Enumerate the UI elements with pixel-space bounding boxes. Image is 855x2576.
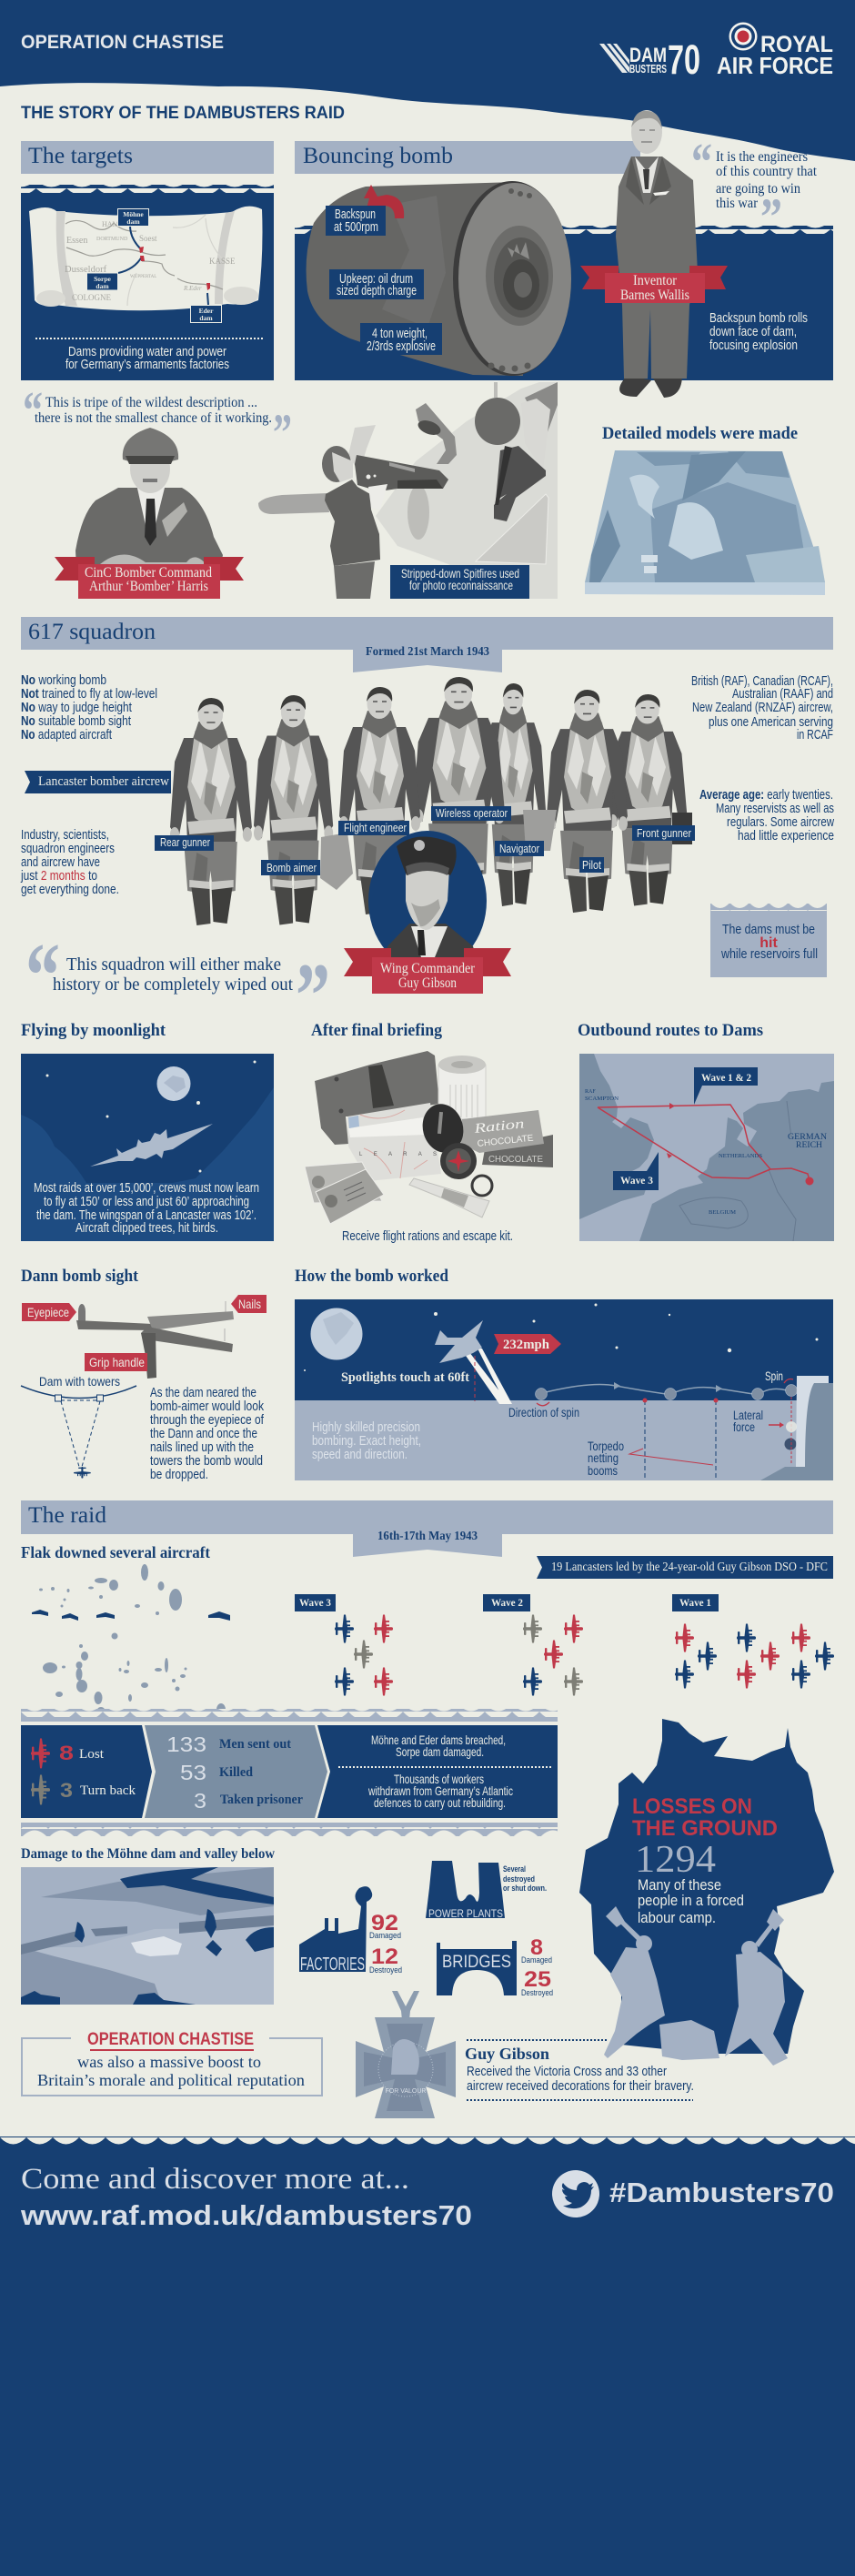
text: power plants: destroyed bbox=[503, 1874, 535, 1884]
text: 2 months: just 2 months to bbox=[20, 869, 97, 884]
camera bbox=[355, 455, 448, 491]
text: 2 months bbox=[20, 828, 119, 897]
quote: squadron: ” bbox=[296, 945, 330, 1047]
Lancaster silhouette bbox=[90, 1124, 213, 1167]
panel: results bbox=[317, 1725, 558, 1818]
label: bomb aimer: Bomb aimer bbox=[267, 861, 317, 874]
illustration: Dann bomb sight tool bbox=[76, 1301, 234, 1379]
map scroll: Essen bbox=[66, 236, 87, 246]
heading: Dann bomb sight: Dann bomb sight bbox=[21, 1267, 139, 1286]
logo: Dam Busters 70: 70 bbox=[668, 36, 700, 83]
label: pilot: Pilot bbox=[582, 858, 601, 872]
stats: factories: Destroyed bbox=[369, 1965, 402, 1975]
quote: Harris bbox=[23, 380, 292, 462]
figure: front gunner bbox=[609, 694, 687, 906]
stats: factories: Damaged bbox=[369, 1931, 401, 1940]
logo: Royal Air Force roundel: ROYAL bbox=[760, 32, 833, 57]
text: 2 months: and aircrew have bbox=[21, 855, 100, 870]
panel: results: withdrawn from Germany’s Atlantic bbox=[367, 1783, 513, 1798]
map scroll: WUPPERTAL bbox=[130, 275, 156, 279]
label: backspun: at 500rpm bbox=[334, 220, 378, 235]
header band bbox=[0, 0, 855, 161]
stats: bridges: 25 bbox=[524, 1967, 551, 1992]
text: 2 months: Industry, scientists, bbox=[21, 828, 109, 843]
icon: power plants: POWER PLANTS bbox=[428, 1907, 503, 1920]
caption: targets: for Germany’s armaments factories bbox=[65, 358, 229, 372]
callout: wave 1 and 2: Wave 1 & 2 bbox=[701, 1073, 751, 1084]
box: morale boost: was also a massive boost to bbox=[77, 2053, 261, 2071]
label: grip handle bbox=[85, 1353, 147, 1371]
quote: Harris: This is tripe of the wildest description ... bbox=[45, 395, 257, 410]
ribbon: Harris bbox=[55, 557, 244, 599]
torpedo netting booms: Torpedo bbox=[588, 1440, 624, 1453]
panel: results: Sorpe dam damaged. bbox=[396, 1744, 484, 1759]
panel: dams must be hit: hit bbox=[759, 935, 778, 951]
quote: squadron: history or be completely wiped out bbox=[53, 975, 293, 995]
quote: engineers: are going to win bbox=[716, 181, 800, 197]
label: Eder dam bbox=[191, 306, 222, 322]
text: backspun bomb rolls: down face of dam, bbox=[709, 325, 797, 339]
text: average age: Average age: early twenties. bbox=[699, 788, 833, 803]
text: losses on the ground: 1294 bbox=[635, 1839, 716, 1881]
caption: rations: Receive flight rations and escape kit. bbox=[342, 1229, 513, 1244]
map: outbound routes bbox=[579, 1054, 834, 1241]
icon: Victoria Cross: FOR VALOUR bbox=[386, 2088, 426, 2095]
pilot bbox=[475, 398, 520, 445]
text: power plants: Several bbox=[503, 1864, 526, 1874]
panel: results: Thousands of workers bbox=[394, 1772, 484, 1786]
stats: bridges bbox=[521, 1935, 553, 1997]
label: backspun bbox=[326, 206, 386, 236]
logo: Dam Busters 70 bbox=[599, 36, 700, 83]
text: Dann sight explanation: through the eyepiece of bbox=[150, 1413, 265, 1428]
illustration: Spitfire photo reconnaissance bbox=[258, 382, 558, 599]
list: no working bomb bbox=[21, 673, 157, 742]
compass bbox=[417, 1099, 492, 1196]
icon: turned back plane bbox=[31, 1775, 50, 1804]
torch bbox=[409, 1178, 489, 1217]
panel: losses: Turn back bbox=[80, 1783, 136, 1798]
panel: losses: 3 bbox=[60, 1779, 73, 1802]
panel: how the bomb worked: Spin bbox=[765, 1369, 783, 1383]
panel: how the bomb worked bbox=[295, 1299, 833, 1480]
caption: targets bbox=[65, 345, 229, 372]
map: outbound routes: SCAMPTON bbox=[585, 1096, 619, 1102]
label: wireless operator: Wireless operator bbox=[436, 806, 508, 820]
label: weight: 2/3rds explosive bbox=[367, 339, 436, 354]
map: outbound routes: RAF bbox=[585, 1089, 596, 1095]
heading: detailed models: Detailed models were made bbox=[602, 424, 798, 443]
aircraft: wave 1 bbox=[675, 1623, 834, 1689]
chocolate bars: Ration bbox=[472, 1116, 525, 1136]
figure: wireless operator bbox=[413, 677, 505, 909]
quote: engineers bbox=[691, 132, 818, 247]
quote: squadron bbox=[25, 924, 330, 1047]
ribbon: Harris: CinC Bomber Command bbox=[85, 565, 212, 581]
icon: factories bbox=[299, 1886, 372, 1975]
ribbon: Wing Commander Guy Gibson bbox=[344, 948, 511, 994]
logo: Dam Busters 70: DAM bbox=[629, 44, 667, 66]
ribbon: Lancaster bomber aircrew: Lancaster bomber aircrew bbox=[38, 774, 170, 789]
aircraft: wave 3 bbox=[335, 1614, 393, 1696]
panel: how the bomb worked: Direction of spin bbox=[508, 1406, 579, 1419]
illustration: terrain model bbox=[585, 450, 825, 595]
silhouettes: labourers bbox=[604, 1906, 788, 2066]
list: no working bomb: No way to judge height bbox=[21, 701, 132, 715]
list: no working bomb: No working bomb bbox=[21, 673, 106, 688]
label: wave 1 bbox=[672, 1594, 719, 1611]
panel: dams must be hit: while reservoirs full bbox=[720, 947, 818, 962]
label: Sorpe dam bbox=[87, 273, 118, 290]
icon: bridges: BRIDGES bbox=[442, 1953, 511, 1972]
tag: 232mph: 232mph bbox=[503, 1338, 550, 1352]
figure: navigator bbox=[481, 683, 546, 906]
stats: bridges: Destroyed bbox=[521, 1988, 553, 1997]
figure: flight engineer bbox=[339, 687, 420, 914]
label: upkeep: Upkeep: oil drum bbox=[339, 272, 413, 287]
stats: bridges: Damaged bbox=[521, 1955, 552, 1965]
panel: men bbox=[145, 1725, 327, 1818]
text: average age bbox=[699, 788, 834, 844]
panel: moonlight: the dam. The wingspan of a Lancaster was 102’. bbox=[36, 1208, 256, 1223]
label: eyepiece bbox=[22, 1303, 76, 1321]
text: average age: had little experience bbox=[738, 829, 834, 844]
box: morale boost: OPERATION CHASTISE bbox=[87, 2030, 254, 2049]
torpedo netting booms bbox=[588, 1398, 719, 1480]
heading: after final briefing: After final briefing bbox=[311, 1021, 442, 1040]
text: Guy Gibson bbox=[465, 2040, 694, 2100]
ribbon: 19 Lancasters bbox=[537, 1556, 833, 1579]
text: 2 months: squadron engineers bbox=[21, 842, 115, 856]
map scroll: COLOGNE bbox=[72, 293, 111, 302]
panel: how the bomb worked: bombing. Exact height, bbox=[312, 1434, 421, 1449]
map scroll: R.Eder bbox=[183, 285, 202, 292]
quote: squadron: This squadron will either make bbox=[66, 955, 281, 975]
footer band bbox=[0, 2137, 855, 2576]
text: losses on the ground: Many of these bbox=[638, 1877, 721, 1894]
footer text: web address: www.raf.mod.uk/dambusters70 bbox=[20, 2199, 472, 2231]
portrait: Guy Gibson bbox=[368, 831, 487, 971]
ribbon: Lancaster bomber aircrew bbox=[25, 771, 171, 793]
chocolate bars: CHOCOLATE bbox=[488, 1155, 543, 1165]
wallet bbox=[315, 1051, 439, 1145]
panel: how the bomb worked: speed and direction. bbox=[312, 1448, 407, 1462]
panel: how the bomb worked: Spotlights touch at 60ft bbox=[341, 1370, 469, 1385]
icon: factories: FACTORIES bbox=[300, 1955, 365, 1975]
stats: factories bbox=[369, 1911, 402, 1975]
label: flight engineer: Flight engineer bbox=[344, 821, 407, 834]
illustration: Lancaster aircrew bbox=[170, 677, 692, 925]
icon: bridges bbox=[437, 1941, 517, 1995]
chocolate bars: CHOCOLATE bbox=[477, 1134, 534, 1149]
map: outbound routes: NETHERLANDS bbox=[719, 1153, 762, 1159]
ribbon: Harris: Arthur ‘Bomber’ Harris bbox=[89, 579, 208, 594]
label: stripped-down Spitfires: for photo reconnaissance bbox=[409, 578, 513, 592]
callout: wave 3 bbox=[613, 1152, 659, 1190]
ribbon: raid date bbox=[353, 1530, 502, 1557]
panel: moonlight: to fly at 150’ or less and just 60’ approaching bbox=[44, 1195, 249, 1209]
figure: Arthur Harris bbox=[75, 428, 223, 569]
diagram: dam with towers: Dam with towers bbox=[39, 1374, 120, 1389]
panel: how the bomb worked: Highly skilled precision bbox=[312, 1420, 420, 1435]
text: power plants bbox=[503, 1864, 547, 1893]
panel: men: 53 bbox=[180, 1761, 206, 1784]
panel: men: Killed bbox=[219, 1765, 254, 1780]
text: Dann sight explanation: the Dann and once the bbox=[150, 1427, 257, 1441]
heading: how the bomb worked: How the bomb worked bbox=[295, 1267, 448, 1286]
text: Dann sight explanation: be dropped. bbox=[150, 1468, 208, 1482]
torpedo netting booms: netting bbox=[588, 1451, 619, 1465]
arrow: backspin bbox=[364, 185, 404, 218]
tag: 232mph bbox=[494, 1334, 561, 1354]
text: 2 months: get everything done. bbox=[21, 883, 119, 897]
panel: moonlight: Most raids at over 15,000’, crews must now learn bbox=[34, 1181, 259, 1196]
label: Möhne dam bbox=[118, 209, 149, 226]
text: nationalities: in RCAF bbox=[797, 728, 833, 742]
quote: Harris: ” bbox=[273, 403, 292, 462]
title: Operation Chastise: OPERATION CHASTISE bbox=[21, 32, 224, 53]
label: wave 2 bbox=[483, 1594, 530, 1611]
text: Dann sight explanation bbox=[150, 1386, 265, 1482]
map scroll bbox=[29, 207, 262, 322]
label: grip handle: Grip handle bbox=[89, 1355, 145, 1369]
ribbon: Inventor Barnes Wallis bbox=[580, 266, 728, 303]
text: Guy Gibson: Received the Victoria Cross and 33 other bbox=[467, 2065, 667, 2079]
diagram: dam with towers bbox=[21, 1374, 136, 1479]
panel: men: 133 bbox=[166, 1732, 206, 1756]
quote: squadron: “ bbox=[25, 924, 60, 1027]
text: backspun bomb rolls: Backspun bomb rolls bbox=[709, 311, 808, 326]
stats: bridges: 8 bbox=[530, 1935, 543, 1960]
label: wave 3: Wave 3 bbox=[299, 1598, 331, 1609]
photographer bbox=[325, 480, 380, 566]
quote: engineers: of this country that bbox=[716, 164, 818, 179]
heading: 617 squadron: 617 squadron bbox=[28, 620, 156, 644]
aircraft: wave 2 bbox=[523, 1614, 583, 1696]
quote: Harris: there is not the smallest chance of it working. bbox=[35, 410, 272, 426]
plane bbox=[435, 1320, 483, 1363]
heading: the raid bbox=[21, 1500, 833, 1534]
figure: Barnes Wallis bbox=[616, 110, 698, 398]
label: upkeep bbox=[329, 269, 424, 299]
text: losses on the ground: labour camp. bbox=[638, 1910, 716, 1926]
heading: 617 squadron bbox=[21, 617, 833, 650]
panel: how the bomb worked: force bbox=[733, 1420, 755, 1434]
panel: dams must be hit bbox=[710, 904, 827, 977]
footer text: call to action: Come and discover more at... bbox=[21, 2163, 409, 2196]
footer text: hashtag: #Dambusters70 bbox=[609, 2177, 834, 2208]
panel: losses: Lost bbox=[79, 1747, 105, 1762]
ribbon: Inventor Barnes Wallis: Barnes Wallis bbox=[620, 288, 689, 303]
list: no working bomb: No adapted aircraft bbox=[21, 728, 112, 742]
icon: power plants bbox=[426, 1861, 505, 1920]
map scroll: HAM bbox=[102, 220, 119, 228]
label: navigator: Navigator bbox=[499, 842, 540, 855]
label: Eder dam: Eder bbox=[199, 307, 214, 315]
panel: moonlight bbox=[21, 1054, 274, 1241]
ribbon: Inventor Barnes Wallis: Inventor bbox=[633, 273, 678, 288]
list: no working bomb: No suitable bomb sight bbox=[21, 714, 131, 729]
panel: the targets bbox=[21, 141, 274, 380]
ribbon: formed date: Formed 21st March 1943 bbox=[366, 645, 489, 659]
label: nails bbox=[231, 1295, 267, 1313]
label: rear gunner bbox=[155, 835, 214, 851]
label: Sorpe dam: dam bbox=[96, 282, 109, 290]
label: Möhne dam: Möhne bbox=[123, 210, 144, 218]
torpedo netting booms: booms bbox=[588, 1464, 618, 1478]
heading: the raid: The raid bbox=[28, 1503, 107, 1528]
text: Dann sight explanation: nails lined up with the bbox=[150, 1440, 254, 1455]
label: Sorpe dam: Sorpe bbox=[94, 275, 112, 283]
box: morale boost: Britain’s morale and political reputation bbox=[37, 2071, 305, 2089]
heading: bouncing bomb bbox=[295, 141, 640, 174]
icon: lost plane bbox=[31, 1739, 50, 1768]
text: losses on the ground: LOSSES ON bbox=[632, 1794, 752, 1819]
silk map bbox=[347, 1103, 441, 1181]
heading: bouncing bomb: Bouncing bomb bbox=[303, 144, 453, 168]
map: outbound routes: REICH bbox=[796, 1140, 823, 1149]
text: Dann sight explanation: towers the bomb would bbox=[150, 1454, 263, 1469]
stats: factories: 92 bbox=[371, 1911, 398, 1935]
text: Dann sight explanation: As the dam neared the bbox=[150, 1386, 256, 1400]
main heading: THE STORY OF THE DAMBUSTERS RAID bbox=[21, 104, 345, 123]
quote: engineers: It is the engineers bbox=[716, 149, 808, 165]
figure: pilot bbox=[547, 690, 628, 913]
illustration: flak bursts bbox=[32, 1564, 230, 1716]
quote: Harris: “ bbox=[23, 380, 43, 439]
ribbon: 19 Lancasters: 19 Lancasters led by the 24-year-old Guy Gibson DSO - DFC bbox=[551, 1560, 828, 1573]
panel: losses bbox=[21, 1725, 152, 1818]
figure: bomb aimer bbox=[254, 695, 333, 924]
label: Möhne dam: dam bbox=[126, 217, 140, 226]
illustration: damaged Möhne dam bbox=[21, 1867, 274, 2005]
ribbon: raid date: 16th-17th May 1943 bbox=[377, 1530, 478, 1543]
text: backspun bomb rolls bbox=[709, 311, 808, 353]
label: eyepiece: Eyepiece bbox=[27, 1305, 69, 1319]
label: Eder dam: dam bbox=[199, 314, 213, 322]
label: front gunner: Front gunner bbox=[637, 826, 692, 840]
icon: twitter bbox=[552, 2170, 599, 2217]
label: weight: 4 ton weight, bbox=[372, 327, 428, 341]
dam wall bbox=[760, 1376, 833, 1480]
heading: outbound routes: Outbound routes to Dams bbox=[578, 1021, 763, 1040]
caption: targets: Dams providing water and power bbox=[68, 345, 226, 359]
text: Guy Gibson: aircrew received decorations for their bravery. bbox=[467, 2079, 694, 2094]
panel: results: Möhne and Eder dams breached, bbox=[371, 1732, 506, 1747]
map: Germany bbox=[579, 1719, 834, 2054]
panel: men: Taken prisoner bbox=[220, 1793, 303, 1807]
label: weight bbox=[360, 323, 442, 355]
label: wave 2: Wave 2 bbox=[491, 1598, 523, 1609]
label: stripped-down Spitfires: Stripped-down Spitfires used bbox=[401, 566, 519, 581]
bomb drum bbox=[307, 181, 571, 376]
text: Guy Gibson: Guy Gibson bbox=[465, 2045, 549, 2063]
label: wave 1: Wave 1 bbox=[679, 1598, 711, 1609]
panel: results: defences to carry out rebuilding. bbox=[374, 1795, 506, 1810]
label: upkeep: sized depth charge bbox=[337, 284, 417, 298]
wave strip: water below stats bbox=[21, 1823, 558, 1836]
bank notes bbox=[305, 1162, 384, 1224]
label: stripped-down Spitfires bbox=[390, 565, 529, 599]
text: backspun bomb rolls: focusing explosion bbox=[709, 338, 798, 353]
illustration: escape kit bbox=[305, 1051, 553, 1224]
panel: men: 3 bbox=[194, 1789, 206, 1813]
stats: factories: 12 bbox=[371, 1945, 398, 1969]
panel: losses: 8 bbox=[59, 1742, 74, 1764]
ration tin bbox=[438, 1056, 486, 1119]
ribbon: formed date bbox=[353, 645, 502, 672]
logo: Royal Air Force roundel: AIR FORCE bbox=[717, 52, 833, 79]
heading: damage: Damage to the Möhne dam and valley below bbox=[21, 1846, 276, 1862]
logo: Dam Busters 70: BUSTERS bbox=[629, 62, 667, 76]
heading: the targets bbox=[21, 141, 274, 174]
text: losses on the ground: THE GROUND bbox=[632, 1816, 778, 1841]
map scroll: Soest bbox=[139, 234, 157, 243]
panel: bouncing bomb bbox=[295, 110, 833, 398]
quote: engineers: this war bbox=[716, 196, 759, 211]
label: nails: Nails bbox=[238, 1297, 261, 1311]
text: losses on the ground bbox=[632, 1794, 778, 1926]
chocolate bars bbox=[461, 1110, 553, 1167]
figure: rear gunner bbox=[170, 698, 252, 925]
logo: Royal Air Force roundel bbox=[717, 22, 833, 79]
panel: how the bomb worked: Lateral bbox=[733, 1409, 763, 1422]
map: outbound routes: BELGIUM bbox=[709, 1209, 736, 1216]
panel: dams must be hit: The dams must be bbox=[722, 923, 815, 937]
ribbon: Wing Commander Guy Gibson: Guy Gibson bbox=[398, 975, 457, 991]
map scroll: Dusseldorf bbox=[65, 265, 107, 275]
text: nationalities bbox=[691, 674, 833, 742]
list: no working bomb: Not trained to fly at low-level bbox=[21, 687, 157, 702]
map: outbound routes: GERMAN bbox=[788, 1132, 828, 1141]
panel: moonlight: Aircraft clipped trees, hit birds. bbox=[75, 1221, 218, 1236]
callout: wave 3: Wave 3 bbox=[620, 1176, 653, 1187]
map scroll: DORTMUND bbox=[96, 237, 128, 242]
label: backspun: Backspun bbox=[335, 207, 376, 222]
label: wave 3 bbox=[295, 1594, 336, 1611]
text: losses on the ground: people in a forced bbox=[638, 1893, 744, 1909]
icon: Victoria Cross bbox=[356, 1991, 456, 2118]
bomb trajectory bbox=[546, 1385, 787, 1394]
panel: men: Men sent out bbox=[219, 1737, 291, 1752]
label: rear gunner: Rear gunner bbox=[160, 835, 211, 849]
ribbon: Wing Commander Guy Gibson: Wing Commander bbox=[380, 961, 476, 976]
text: Dann sight explanation: bomb-aimer would look bbox=[150, 1399, 265, 1414]
wave strip: water above stats bbox=[21, 1709, 558, 1722]
quote: engineers: ” bbox=[760, 187, 782, 247]
silk map: L E A R A S bbox=[359, 1152, 437, 1157]
heading: flak: Flak downed several aircraft bbox=[21, 1543, 210, 1561]
heading: the targets: The targets bbox=[28, 144, 133, 168]
box: morale boost bbox=[22, 2030, 322, 2096]
callout: wave 1 and 2 bbox=[694, 1067, 758, 1105]
map scroll: KASSE bbox=[209, 257, 236, 266]
text: power plants: or shut down. bbox=[503, 1884, 547, 1893]
label: bomb aimer bbox=[261, 860, 320, 875]
quote: engineers: “ bbox=[691, 132, 712, 191]
heading: flying by moonlight: Flying by moonlight bbox=[21, 1021, 166, 1040]
